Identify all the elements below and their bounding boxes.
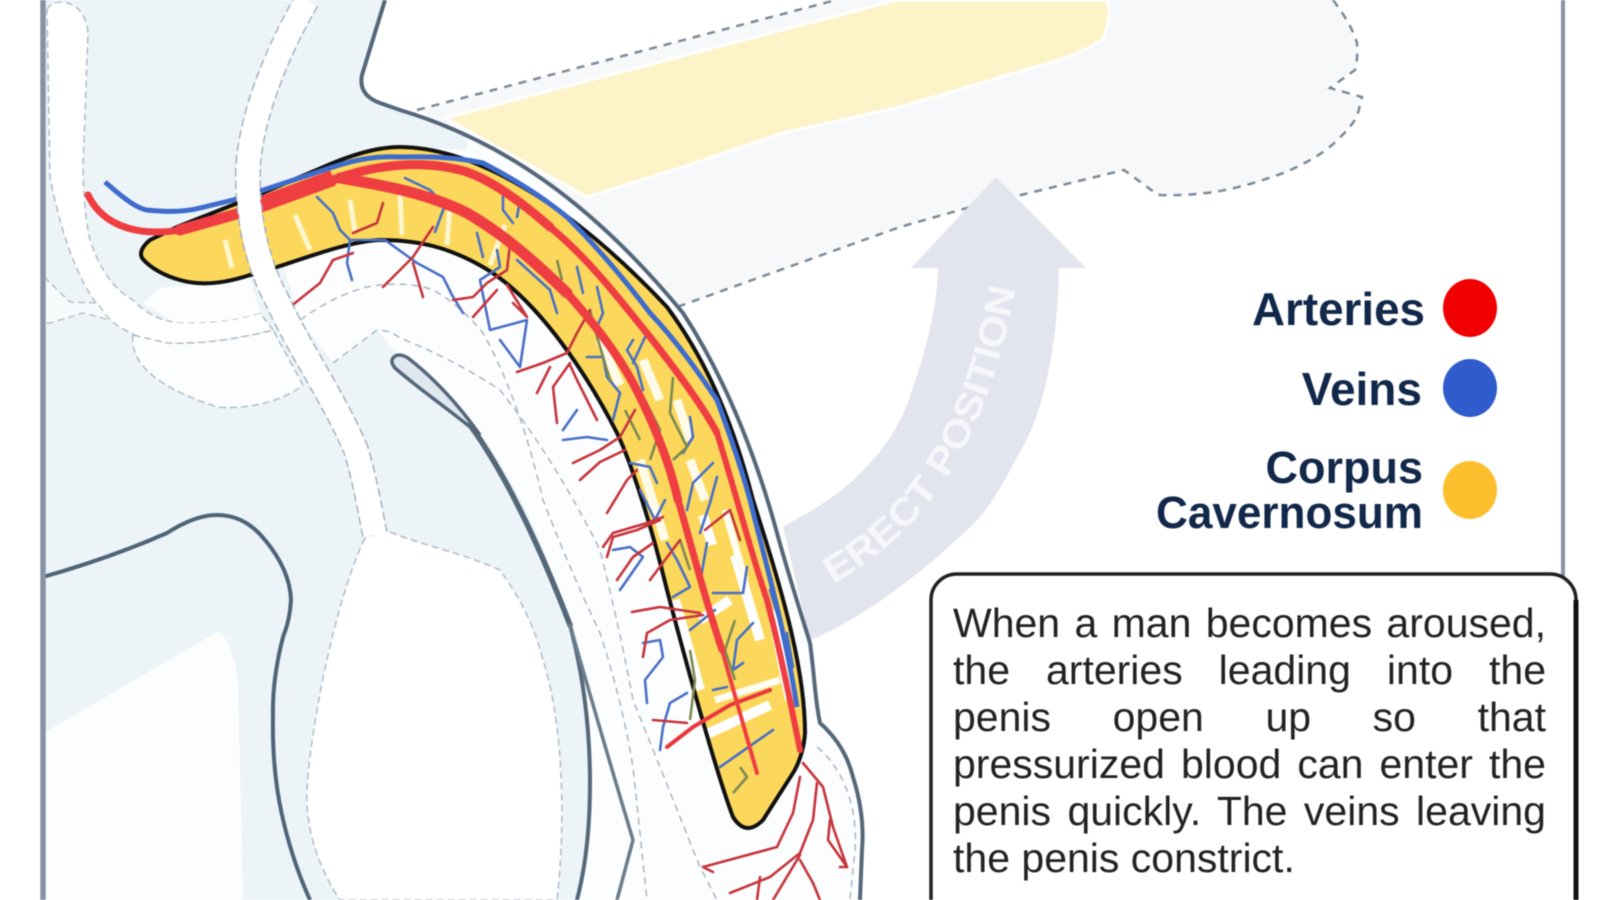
gland: lobe below the duct [133,330,303,408]
legend item: arteries: Arteries [1252,283,1425,335]
tube: left duct [47,2,273,343]
legend item: corpus cavernosum [1156,442,1497,538]
legend item: veins [1302,359,1497,417]
callout text: pressurized blood can enter the [953,741,1546,787]
callout text: the penis constrict. [953,835,1295,881]
arrow: erect position [783,178,1086,640]
corpus cavernosum: pale patches [225,195,790,760]
testis [307,530,562,900]
thigh: white area [44,632,243,900]
tissue: white area under corpus base [143,278,260,323]
callout text: When a man becomes aroused, [953,600,1546,646]
callout text: the arteries leading into the [953,647,1546,693]
shaft: white interior [260,133,863,900]
legend item: arteries [1252,279,1497,337]
callout box [931,574,1576,900]
urethra: white band with dashed edges [248,0,375,535]
callout text: penis open up so that [953,694,1546,740]
artery: crossing branch [667,690,770,747]
arteries: small red branches [290,203,847,900]
legend [1156,279,1497,538]
legend item: corpus cavernosum: Corpus [1266,442,1423,493]
erect position outline: ghosted shape [417,0,1362,307]
internal duct: dark forked sliver [392,355,633,900]
corpus cavernosum [141,147,805,828]
arrow: erect position: ERECT POSITION [822,286,1015,582]
pelvic band: small white band [44,277,110,323]
arteries: main red vessels [88,165,800,773]
veins: olive branches inside corpus [557,260,747,793]
thigh outline [43,515,310,900]
legend item: corpus cavernosum: Cavernosum [1156,487,1423,538]
legend item: veins: Veins [1302,363,1422,415]
vein: main dorsal vein [105,157,797,707]
tissue layers: dashed contours [300,284,855,900]
callout text [952,600,1546,882]
veins: small branches [317,178,793,767]
erect position: pale yellow corpus [445,0,1109,197]
body: pale blue tissue [44,0,863,900]
outer outline: dark contour [361,0,863,900]
callout text: penis quickly. The veins leaving [953,788,1546,834]
